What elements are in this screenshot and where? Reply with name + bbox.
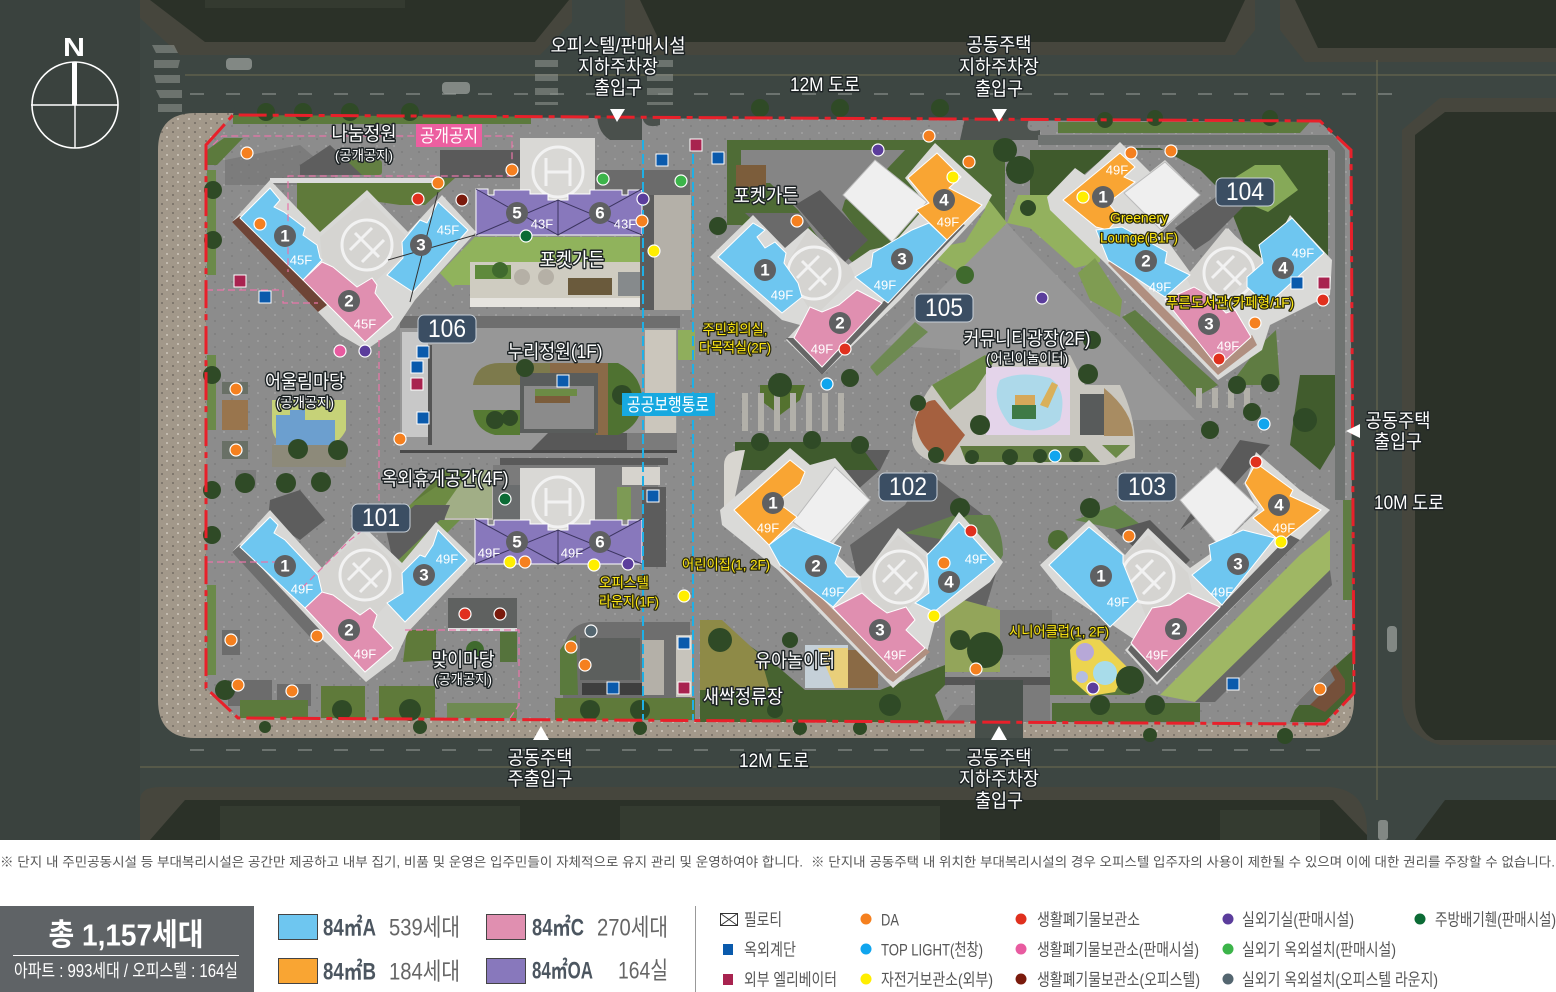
legend: facility symbols: 생활폐기물보관소(오피스텔) bbox=[1037, 970, 1200, 990]
building 101 core with helipad bbox=[318, 532, 402, 615]
unit number circles: 5 bbox=[512, 532, 522, 552]
building 105 core with helipad bbox=[784, 230, 855, 317]
officetel lounge outdoor unit marker bbox=[585, 625, 597, 637]
legend: unit types bbox=[278, 914, 668, 986]
panel: total households: 아파트 : 993세대 / 오피스텔 : 164실 bbox=[14, 961, 238, 981]
floor labels: 49F bbox=[771, 288, 793, 302]
floor labels: 49F bbox=[291, 582, 313, 596]
wing 84A unit 1 bbox=[1049, 527, 1138, 627]
retail outdoor unit room markers bbox=[359, 144, 1099, 694]
building 102 tan wall bbox=[780, 563, 930, 682]
floor labels: 49F bbox=[1106, 162, 1128, 178]
floor labels: 49F bbox=[1149, 280, 1171, 294]
officetel 84OA north block bbox=[476, 189, 642, 235]
building 104 roof bbox=[1124, 162, 1200, 230]
floor labels bbox=[290, 162, 1314, 662]
legend: facility symbols: 자전거보관소(외부) bbox=[881, 970, 993, 990]
road and entrance labels: 출입구 bbox=[1374, 431, 1422, 453]
building number badges: 105 bbox=[925, 294, 963, 322]
building 101 gray wall bbox=[232, 545, 320, 637]
facility labels: 어울림마당 bbox=[265, 371, 345, 393]
unit number circles: 2 bbox=[835, 314, 845, 332]
unit number circles: 1 bbox=[768, 494, 778, 512]
legend: facility symbols: 실외기 옥외설치(판매시설) bbox=[1242, 940, 1396, 960]
road and entrance labels: 출입구 bbox=[594, 77, 642, 99]
building 106 base bbox=[232, 180, 476, 350]
legend: unit types: 84㎡OA bbox=[532, 956, 593, 984]
compass north bbox=[31, 32, 118, 148]
wing 84B unit 4 bbox=[908, 153, 982, 240]
wing 84C unit 2 bbox=[303, 262, 393, 342]
unit number circles: 4 bbox=[939, 190, 949, 210]
landscape: east section bbox=[640, 113, 1353, 722]
facility labels: (공개공지) bbox=[434, 672, 492, 688]
waste storage markers bbox=[412, 193, 1329, 620]
floor labels: 43F bbox=[531, 216, 553, 232]
site boundary red line bbox=[206, 115, 1354, 724]
entrance roads and dark driveways bbox=[597, 113, 1050, 738]
unit number circles: 5 bbox=[512, 204, 522, 222]
building 105 base bbox=[710, 143, 992, 375]
building 103 tower bbox=[1040, 452, 1330, 685]
top light markers bbox=[821, 378, 1270, 462]
wing 84C unit 2 bbox=[1131, 593, 1220, 672]
building 102 roof bbox=[793, 467, 870, 547]
building number badges: 102 bbox=[889, 473, 927, 501]
floor labels: 49F bbox=[811, 342, 833, 356]
legend: facility symbols: TOP LIGHT(천창) bbox=[881, 940, 983, 960]
unit number circles: 6 bbox=[595, 204, 605, 222]
unit number circles: 3 bbox=[875, 620, 885, 640]
floor labels: 49F bbox=[822, 584, 844, 600]
unit number circles: 2 bbox=[1141, 252, 1151, 270]
building 104 brown wall bbox=[1108, 258, 1257, 375]
facility labels: (어린이놀이터) bbox=[986, 350, 1068, 366]
floor labels: 49F bbox=[1146, 648, 1168, 662]
building 106 brown wall bbox=[232, 216, 327, 312]
piloti cross lines bbox=[388, 192, 475, 302]
landscape: west section bbox=[207, 115, 695, 720]
wing 84B unit 4 bbox=[1245, 463, 1321, 542]
wing 84A unit 4 bbox=[1247, 218, 1324, 305]
building 104 base bbox=[1047, 142, 1332, 380]
unit number circles: 3 bbox=[416, 236, 426, 254]
building number badges: 103 bbox=[1128, 473, 1166, 501]
wing 84A unit 4 bbox=[915, 522, 995, 612]
floor labels: 49F bbox=[965, 552, 987, 566]
unit number circles: 3 bbox=[1204, 314, 1214, 334]
legend: facility symbols: 생활폐기물보관소(판매시설) bbox=[1037, 940, 1199, 960]
facility labels: 맞이마당 bbox=[432, 649, 494, 671]
site ground bbox=[206, 116, 1353, 724]
footer background bbox=[0, 840, 1556, 992]
DA markers bbox=[225, 130, 1326, 697]
building 105 tower bbox=[710, 143, 992, 375]
building 101 base bbox=[232, 510, 476, 682]
legend: unit types: 84㎡C bbox=[532, 914, 584, 942]
panel: total households: 총 1,157세대 bbox=[48, 918, 204, 952]
building 103 dark edge bbox=[1128, 535, 1300, 682]
wing 84C unit 3 bbox=[1165, 287, 1251, 367]
legend: facility symbols: DA bbox=[881, 910, 899, 930]
facility labels: 나눔정원 bbox=[332, 123, 396, 145]
facility labels: 라운지(1F) bbox=[599, 594, 659, 610]
floor labels: 49F bbox=[1107, 594, 1129, 610]
wing 84A unit 2 bbox=[769, 527, 860, 607]
floor labels: 49F bbox=[1217, 338, 1239, 354]
wing 84A unit 3 bbox=[387, 530, 467, 622]
kitchen exhaust markers bbox=[499, 230, 532, 505]
cyan tag: public walkway: 공공보행통로 bbox=[627, 395, 709, 415]
facility labels: 어린이집(1, 2F) bbox=[682, 556, 770, 572]
unit number circles: 1 bbox=[280, 556, 290, 576]
facility labels: Lounge(B1F) bbox=[1100, 230, 1178, 246]
wing 84C unit 3 bbox=[833, 593, 925, 673]
pink tag: public open space: 공개공지 bbox=[420, 126, 478, 146]
retail outdoor unit markers bbox=[597, 173, 687, 187]
wing 84A unit 2 bbox=[1096, 227, 1190, 297]
compass letter N: N bbox=[63, 32, 85, 62]
legend: facility symbols: 옥외계단 bbox=[744, 940, 796, 960]
footnote right: ※ 단지내 공동주택 내 위치한 부대복리시설의 경우 오피스텔 입주자의 사용이 제한될 수 있으며 이에 대한 권리를 주장할 수 없습니다. bbox=[811, 854, 1555, 870]
legend: unit types: 84㎡A bbox=[323, 914, 376, 942]
wing 84C unit 2 bbox=[794, 290, 882, 367]
building 101 tower bbox=[232, 510, 476, 682]
facility labels: 푸른도서관(카페형/1F) bbox=[1166, 294, 1294, 310]
unit number circles: 1 bbox=[1096, 566, 1106, 586]
facility labels: (공개공지) bbox=[335, 148, 393, 164]
road and entrance labels: 10M 도로 bbox=[1374, 493, 1444, 514]
officetel waste storage markers bbox=[456, 194, 506, 620]
road and entrance labels: 지하주차장 bbox=[959, 768, 1039, 790]
facility labels: 새싹정류장 bbox=[703, 686, 783, 708]
unit number circles: 2 bbox=[811, 556, 821, 576]
entrance arrows bbox=[533, 109, 1360, 740]
wing 84C unit 2 bbox=[305, 592, 393, 672]
floor labels: 49F bbox=[1292, 246, 1314, 260]
facility labels: 포켓가든 bbox=[734, 185, 798, 207]
floor labels: 45F bbox=[354, 316, 376, 332]
building 105 shadow edge bbox=[786, 222, 965, 375]
floor labels: 49F bbox=[436, 552, 458, 566]
building 102 tower bbox=[720, 448, 1003, 688]
floor labels: 43F bbox=[614, 216, 636, 232]
facility labels bbox=[265, 123, 1294, 708]
unit number circles: 3 bbox=[419, 566, 429, 584]
building 106 tower bbox=[232, 180, 476, 350]
building 106 core with helipad bbox=[320, 197, 407, 287]
floor labels: 49F bbox=[1211, 584, 1233, 600]
floor labels: 45F bbox=[437, 222, 459, 238]
building 105 roof bbox=[843, 160, 927, 242]
bicycle storage markers bbox=[504, 171, 1287, 622]
building 104 core with helipad bbox=[1186, 228, 1267, 317]
road and entrance labels: 지하주차장 bbox=[959, 56, 1039, 78]
road and entrance labels: 12M 도로 bbox=[739, 751, 809, 772]
facility labels: 누리정원(1F) bbox=[508, 341, 602, 363]
road strip above site bbox=[233, 105, 1320, 121]
legend: facility symbols: 실외기 옥외설치(오피스텔 라운지) bbox=[1242, 970, 1438, 990]
unit number circles: 4 bbox=[1274, 496, 1284, 514]
road and entrance labels: 출입구 bbox=[975, 790, 1023, 812]
trees bbox=[203, 99, 1317, 744]
unit number circles: 2 bbox=[1171, 620, 1181, 638]
wing 84B unit 1 bbox=[1063, 153, 1135, 230]
building number badges bbox=[352, 178, 1274, 532]
facility labels: 유아놀이터 bbox=[755, 650, 835, 672]
wing 84A unit 1 bbox=[240, 188, 322, 280]
legend: unit types: 164실 bbox=[618, 958, 668, 984]
unit number circles: 1 bbox=[280, 226, 290, 246]
floor labels: 49F bbox=[874, 278, 896, 292]
legend: facility symbols: 생활폐기물보관소 bbox=[1037, 910, 1140, 930]
wing 84A unit 3 bbox=[1192, 530, 1275, 605]
floor labels: 45F bbox=[290, 252, 312, 268]
road and entrance labels: 공동주택 bbox=[1366, 410, 1430, 432]
wing 84A unit 1 bbox=[240, 517, 322, 608]
legend: facility symbols: 실외기실(판매시설) bbox=[1242, 910, 1354, 930]
road and entrance labels: 공동주택 bbox=[966, 34, 1032, 56]
officetel 84OA south block bbox=[475, 519, 642, 564]
legend: unit types: 84㎡B bbox=[323, 958, 376, 986]
footnote left: ※ 단지 내 주민공동시설 등 부대복리시설은 공간만 제공하고 내부 집기, 비품 및 운영은 입주민들이 자체적으로 유지 관리 및 운영하여야 합니다. bbox=[0, 854, 803, 870]
unit number circles: 3 bbox=[1233, 554, 1243, 574]
road and entrance labels: 12M 도로 bbox=[790, 75, 860, 96]
road and entrance labels: 주출입구 bbox=[508, 768, 572, 790]
wing 84A unit 1 bbox=[718, 223, 802, 313]
tower helipad block north bbox=[520, 138, 595, 200]
floor labels: 49F bbox=[757, 520, 779, 536]
wing 84A unit 3 bbox=[387, 202, 468, 292]
floor labels: 49F bbox=[561, 546, 583, 560]
outdoor stair markers bbox=[259, 152, 1303, 694]
road and entrance labels: 출입구 bbox=[975, 78, 1023, 100]
tower helipad block south bbox=[520, 468, 595, 530]
floor labels: 49F bbox=[884, 648, 906, 662]
floor labels: 49F bbox=[354, 646, 376, 662]
building 102 core with helipad bbox=[860, 535, 929, 613]
retail waste storage marker bbox=[334, 345, 346, 357]
road and entrance labels: 공동주택 bbox=[508, 747, 572, 769]
building number badges: 104 bbox=[1226, 178, 1264, 206]
facility labels: 포켓가든 bbox=[540, 249, 604, 271]
facility labels: 커뮤니티광장(2F) bbox=[964, 328, 1090, 350]
road and entrance labels: 오피스텔/판매시설 bbox=[550, 35, 686, 57]
public walkway dashed lines bbox=[643, 140, 693, 720]
unit number circles: 6 bbox=[595, 532, 605, 552]
legend divider bbox=[695, 906, 696, 992]
legend: unit types: 184세대 bbox=[389, 958, 460, 986]
building 102 base bbox=[720, 448, 1003, 688]
building 103 base bbox=[1040, 452, 1330, 685]
unit number circles: 4 bbox=[1278, 258, 1288, 278]
wing 84A unit 3 bbox=[855, 223, 947, 303]
facility labels: (공개공지) bbox=[276, 394, 334, 410]
legend: unit types: 270세대 bbox=[597, 914, 668, 942]
external elevator markers bbox=[234, 139, 1330, 694]
legend: unit types: 539세대 bbox=[389, 914, 460, 942]
site sidewalk bbox=[158, 113, 1354, 738]
panel: total households bbox=[0, 906, 254, 992]
floor labels: 49F bbox=[1273, 520, 1295, 536]
facility labels: 오피스텔 bbox=[599, 574, 649, 590]
central playground plaza bbox=[912, 355, 1135, 465]
legend: facility symbols: 필로티 bbox=[744, 910, 782, 930]
facility labels: 옥외휴게공간(4F) bbox=[382, 468, 508, 490]
floor labels: 49F bbox=[937, 214, 959, 230]
legend: facility symbols: 외부 엘리베이터 bbox=[744, 970, 837, 990]
building 103 core with helipad bbox=[1122, 535, 1192, 617]
building number badges: 106 bbox=[428, 315, 466, 343]
road and entrance labels bbox=[508, 34, 1444, 812]
unit number circles: 4 bbox=[944, 572, 954, 592]
unit number circles: 1 bbox=[1098, 188, 1108, 206]
wing 84B unit 1 bbox=[734, 460, 805, 545]
unit number circles: 3 bbox=[897, 250, 907, 268]
unit number circles: 2 bbox=[344, 620, 354, 640]
building 104 tower bbox=[1047, 142, 1332, 380]
legend: facility symbols bbox=[720, 910, 1556, 990]
facility labels: 주민회의실, bbox=[702, 322, 768, 338]
building 103 roof bbox=[1180, 467, 1258, 547]
road and entrance labels: 지하주차장 bbox=[578, 56, 658, 78]
unit number circles bbox=[274, 186, 1294, 641]
unit number circles: 1 bbox=[760, 260, 770, 280]
facility labels: 다목적실(2F) bbox=[699, 340, 771, 356]
facility labels: 시니어클럽(1, 2F) bbox=[1009, 624, 1109, 640]
floor labels: 49F bbox=[478, 546, 500, 560]
building number badges: 101 bbox=[362, 504, 400, 532]
facility labels: Greenery bbox=[1110, 210, 1168, 226]
pink public open space boundaries bbox=[206, 136, 519, 718]
icon: piloti bbox=[720, 914, 738, 926]
road and entrance labels: 공동주택 bbox=[966, 747, 1032, 769]
unit number circles: 2 bbox=[344, 292, 354, 310]
